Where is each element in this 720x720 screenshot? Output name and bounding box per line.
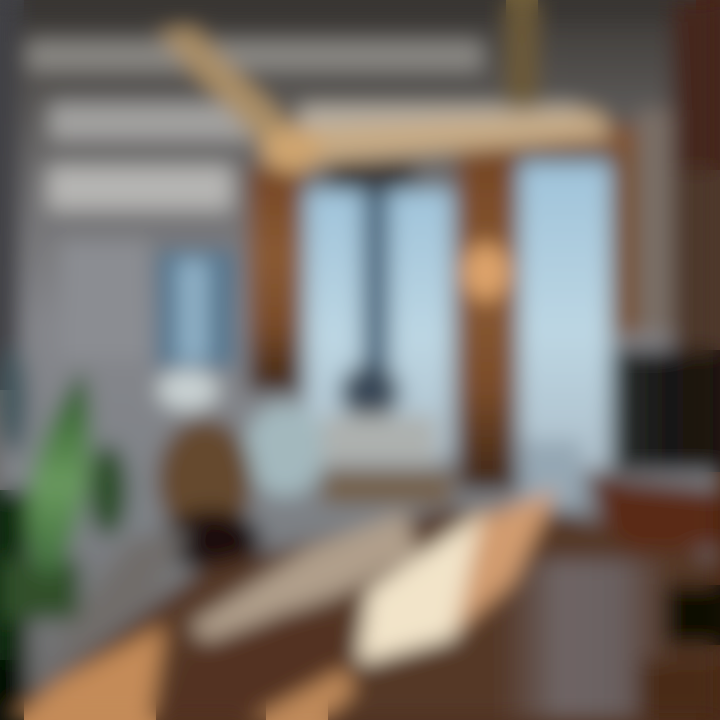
windows bbox=[156, 164, 610, 510]
lower warm strip bbox=[250, 668, 355, 720]
foreground shadow bbox=[160, 610, 345, 720]
brown armchair bbox=[157, 418, 253, 542]
stone grey runner bbox=[60, 530, 190, 660]
wall lamp glow bbox=[462, 244, 510, 300]
back blue-grey leaf bbox=[0, 346, 28, 454]
floor bbox=[0, 488, 720, 720]
main leaf bbox=[27, 370, 91, 576]
blurred title text bbox=[28, 42, 582, 210]
dark foliage bbox=[0, 490, 80, 720]
warm left strip bbox=[14, 625, 165, 720]
chair shadow bbox=[665, 585, 720, 645]
bright sunlight patch bbox=[358, 512, 510, 664]
sofa bbox=[157, 370, 452, 570]
window dark mullion and tower bbox=[330, 162, 414, 420]
right wood wall bbox=[672, 0, 720, 370]
chair seat bbox=[590, 470, 720, 550]
grey reflection bbox=[500, 560, 670, 720]
warm orange edge bbox=[455, 488, 558, 632]
right armchair bbox=[590, 350, 720, 720]
brown sill bbox=[322, 472, 452, 504]
side leaf bbox=[88, 444, 128, 536]
plant bbox=[0, 346, 128, 720]
chair back bbox=[612, 350, 720, 472]
central pale rug bbox=[190, 512, 418, 642]
floor base bbox=[0, 510, 720, 720]
light cushions bbox=[158, 370, 437, 496]
ceiling light beams bbox=[158, 0, 610, 172]
wood pillars bbox=[248, 125, 638, 490]
